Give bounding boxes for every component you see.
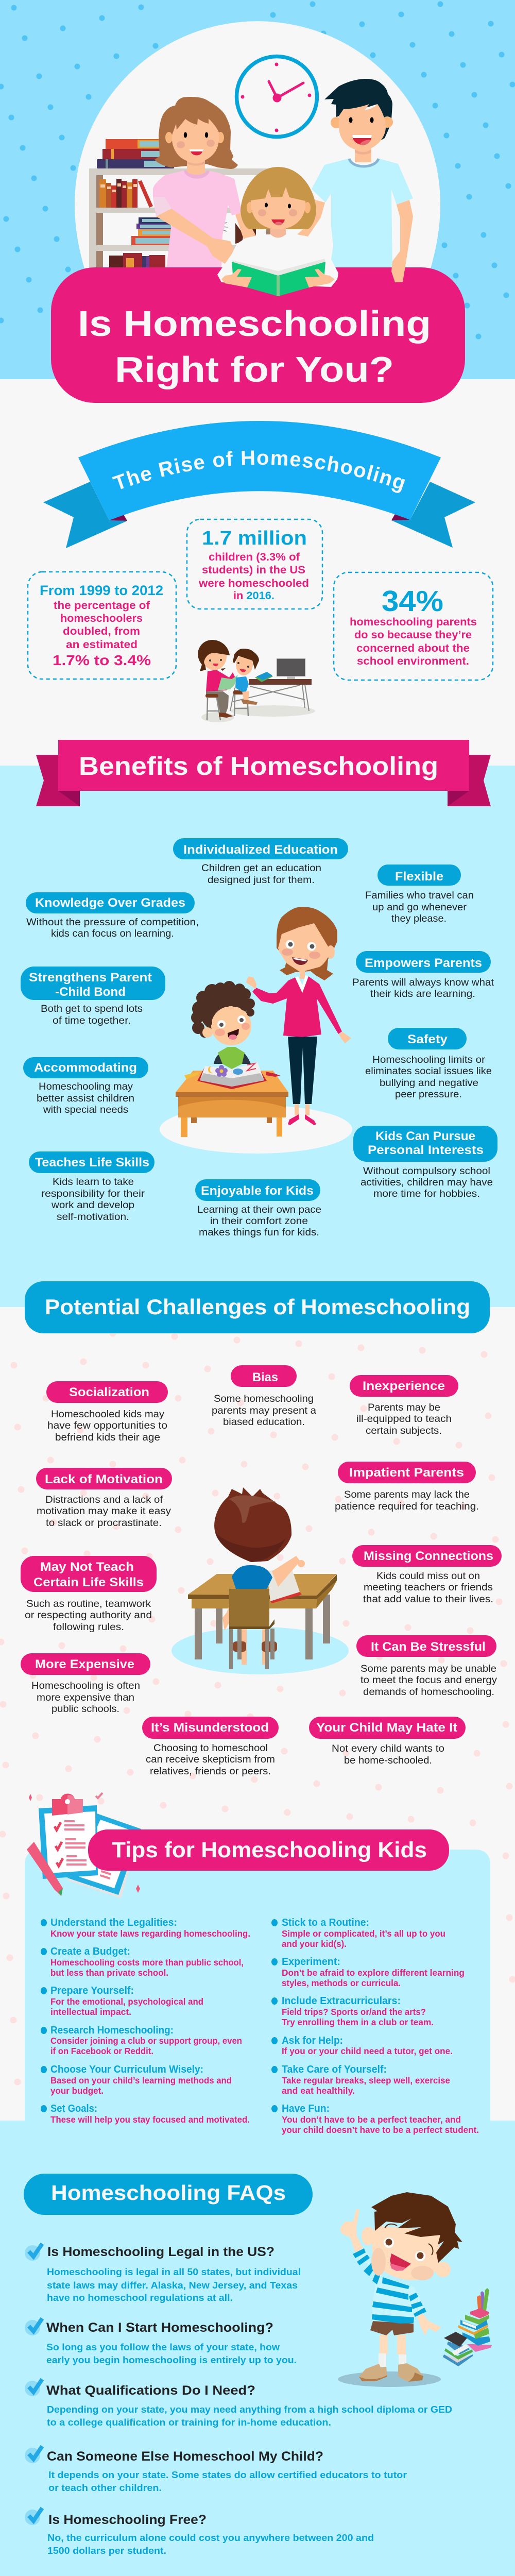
challenge: Missing Connections: Kids could miss out on (376, 1571, 480, 1582)
challenge: More Expensive: Homeschooling is often (31, 1681, 140, 1691)
challenge: Impatient Parents: Some parents may lack the (344, 1489, 470, 1500)
icon: check mark (25, 2508, 42, 2525)
stat box: 1999 to 2012: From 1999 to 2012 (40, 583, 163, 598)
FAQ: Is Homeschooling Free: 1500 dollars per student. (47, 2546, 166, 2556)
benefit: Strengthens Parent-Child Bond: of time together. (53, 1015, 131, 1026)
FAQ: What Qualifications: What Qualifications Do I Need? (46, 2383, 255, 2398)
tip: Prepare Yourself: Prepare Yourself: (50, 1985, 134, 1996)
section banner: The Rise of Homeschooling (43, 421, 475, 548)
FAQ: Can Someone Else: It depends on your state. Some states do allow certified educators to tutor (48, 2470, 407, 2480)
benefit: Teaches Life Skills: work and develop (51, 1200, 134, 1211)
tip: Ask for Help (271, 2035, 453, 2056)
benefit: Enjoyable for Kids: in their comfort zone (210, 1216, 308, 1227)
benefit: Flexible: they please. (391, 913, 447, 924)
ribbon tails (36, 755, 491, 806)
icon: check mark (25, 2244, 42, 2261)
challenge: Impatient Parents: Impatient Parents (349, 1466, 464, 1480)
benefit: Kids Can Pursue Personal Interests: more time for hobbies. (373, 1189, 480, 1199)
tip: Ask for Help: If you or your child need a tutor, get one. (282, 2046, 453, 2056)
heading pill: Homeschooling FAQs (51, 2181, 286, 2205)
tip: Have Fun: Have Fun: (282, 2103, 330, 2114)
tips column: right (271, 1917, 479, 2135)
hero: family illustration and title (51, 21, 465, 403)
challenge: Your Child May Hate It: Not every child wants to (332, 1743, 444, 1754)
challenge: Inexperience (350, 1375, 458, 1436)
title: Is Homeschooling (78, 303, 431, 344)
tip: Include Extracurriculars (271, 1995, 434, 2027)
FAQ: Is Homeschooling Free: No, the curriculum alone could cost you anywhere between 200 and (47, 2533, 374, 2543)
challenge: Lack of Motivation: Distractions and a lack of (45, 1495, 163, 1505)
challenge: Inexperience: Parents may be (368, 1402, 440, 1413)
stools (207, 694, 248, 720)
benefit: Kids Can Pursue Personal Interests: Without compulsory school (363, 1166, 490, 1177)
tip: Take Care of Yourself: Take regular breaks, sleep well, exercise (282, 2075, 450, 2086)
challenge: Impatient Parents (335, 1462, 479, 1512)
benefit: Knowledge Over Grades: Without the pressure of competition, (26, 917, 199, 928)
challenge: It's Misunderstood (142, 1717, 279, 1777)
FAQ: When Can I Start: early you begin homeschooling is entirely up to you. (46, 2355, 297, 2365)
tip: Include Extracurriculars: Field trips? Sports or/and the arts? (282, 2007, 426, 2017)
challenge: It's Misunderstood: Choosing to homeschool (153, 1743, 268, 1754)
hair (214, 1487, 291, 1562)
mother (198, 640, 238, 718)
benefit: Enjoyable for Kids: makes things fun for kids. (199, 1227, 319, 1238)
shirt (353, 2248, 426, 2324)
challenge: Bias (212, 1365, 316, 1428)
tip: Have Fun (271, 2103, 479, 2135)
benefit: Individualized Education: Individualized Education (183, 843, 338, 857)
tip: Set Goals (41, 2103, 250, 2125)
challenge: It Can Be Stressful: Some parents may be unable (360, 1664, 496, 1674)
tip: Stick to a Routine: and your kid(s). (282, 1939, 347, 1949)
benefit: Safety: Safety (407, 1032, 448, 1046)
challenge: More Expensive: More Expensive (35, 1657, 134, 1671)
benefit: Teaches Life Skills: self-motivation. (57, 1212, 129, 1223)
challenge: More Expensive: public schools. (52, 1704, 119, 1715)
teacher (246, 907, 351, 1125)
icon: check mark (25, 2446, 42, 2463)
benefit: Teaches Life Skills: Teaches Life Skills (35, 1156, 149, 1170)
tip: Choose Your Curriculum Wisely: your budget. (50, 2086, 104, 2096)
book stack (443, 2288, 492, 2366)
tip: Stick to a Routine: Stick to a Routine: (282, 1917, 369, 1928)
challenge: Socialization: Homeschooled kids may (51, 1409, 165, 1420)
challenge: Lack of Motivation (36, 1468, 172, 1529)
challenge: Lack of Motivation: Lack of Motivation (45, 1472, 163, 1486)
benefit: Knowledge Over Grades: Knowledge Over Grades (35, 896, 185, 910)
stat box: 34%: concerned about the (356, 642, 470, 654)
son (233, 649, 259, 705)
benefit: Knowledge Over Grades (26, 892, 199, 939)
benefit: Accommodating: with special needs (43, 1105, 128, 1115)
tip: Prepare Yourself (41, 1985, 203, 2017)
tip: Experiment (271, 1956, 465, 1988)
open book (197, 1062, 267, 1089)
challenge: Bias: biased education. (223, 1417, 305, 1428)
benefit: Strengthens Parent-Child Bond: -Child Bond (55, 985, 126, 999)
FAQ: What Qualifications (25, 2379, 452, 2428)
benefit: Individualized Education: designed just for them. (208, 875, 315, 886)
FAQ: When Can I Start: When Can I Start Homeschooling? (46, 2320, 273, 2335)
chair (229, 1589, 274, 1669)
stat box: 1.7 million: 1.7 million (202, 528, 307, 549)
stat box: 1.7 million (187, 519, 322, 609)
benefit: Safety (365, 1028, 492, 1100)
heading pill (88, 1829, 449, 1871)
tip: Choose Your Curriculum Wisely: Based on your child’s learning methods and (50, 2075, 232, 2086)
tip: Set Goals: These will help you stay focused and motivated. (50, 2114, 250, 2125)
stat box: 1999 to 2012: an estimated (66, 639, 138, 651)
stat box: 1999 to 2012: the percentage of (54, 600, 150, 612)
challenge: May Not Teach Certain Life Skills: May Not Teach (40, 1560, 134, 1574)
tip: Prepare Yourself: intellectual impact. (50, 2007, 131, 2017)
tip: Research Homeschooling (41, 2025, 242, 2056)
benefit: Empowers Parents: Empowers Parents (365, 956, 482, 970)
challenge: It's Misunderstood: can receive skepticism from (146, 1754, 275, 1765)
panel: benefits (21, 838, 497, 1238)
tip: Stick to a Routine: Simple or complicated, it’s all up to you (282, 1928, 445, 1939)
boy (340, 2192, 462, 2382)
tip: Take Care of Yourself: Take Care of Yourself: (282, 2064, 387, 2075)
challenge: Socialization (46, 1381, 168, 1443)
figure: girl reading a book (217, 167, 338, 296)
legs and shoes (359, 2319, 423, 2382)
benefit: Accommodating: Accommodating (34, 1061, 137, 1075)
benefit: Empowers Parents: Parents will always know what (352, 977, 494, 988)
tip: Take Care of Yourself (271, 2064, 450, 2096)
FAQ: Is Homeschooling Free: Is Homeschooling Free? (48, 2513, 207, 2527)
benefit: Safety: Homeschooling limits or (372, 1055, 486, 1065)
benefit: Flexible: up and go whenever (372, 902, 467, 913)
benefit: Accommodating: Homeschooling may (39, 1081, 133, 1092)
challenge: Bias: parents may present a (212, 1405, 316, 1416)
challenge: Missing Connections: that add value to their lives. (363, 1594, 493, 1605)
FAQ: Is Homeschooling Legal: Is Homeschooling Legal in the US? (47, 2245, 274, 2259)
benefit: Individualized Education: Children get an education (201, 863, 321, 874)
tip: Understand the Legalities: Know your state laws regarding homeschooling. (50, 1928, 250, 1939)
FAQ: Is Homeschooling Free (25, 2508, 374, 2556)
FAQ: What Qualifications: Depending on your state, you may need anything from a high school diploma or GED (47, 2404, 452, 2415)
benefit: Teaches Life Skills: responsibility for their (41, 1189, 145, 1199)
curved ribbon title: The Rise of Homeschooling (112, 450, 405, 493)
tip: Take Care of Yourself: and eat healthily. (282, 2086, 355, 2096)
benefit: Flexible: Families who travel can (365, 890, 474, 901)
benefit: Strengthens Parent-Child Bond: Strengthens Parent (29, 971, 152, 985)
stat box: 1.7 million: students) in the US (202, 564, 305, 576)
benefit: Teaches Life Skills (29, 1151, 154, 1223)
FAQ: Is Homeschooling Legal: state laws may differ. Alaska, New Jersey, and Texas (47, 2280, 298, 2291)
tip: Research Homeschooling: Research Homeschooling: (50, 2025, 174, 2036)
tip: Experiment: Don’t be afraid to explore different learning (282, 1968, 465, 1978)
tip: Create a Budget: but less than private school. (50, 1968, 168, 1978)
challenge: More Expensive (21, 1653, 150, 1715)
benefit: Accommodating: better assist children (37, 1093, 134, 1104)
tip: Choose Your Curriculum Wisely (41, 2064, 232, 2096)
benefit: Kids Can Pursue Personal Interests: Personal Interests (368, 1143, 484, 1157)
benefit: Kids Can Pursue Personal Interests (353, 1126, 497, 1199)
illustration: mother and son at a desk (198, 640, 315, 722)
boy (191, 981, 255, 1069)
icon: check mark (25, 2318, 42, 2335)
challenge: Inexperience: ill-equipped to teach (356, 1414, 452, 1425)
bookshelf with books (89, 139, 273, 270)
FAQ: Is Homeschooling Legal: Homeschooling is legal in all 50 states, but individual (47, 2267, 301, 2277)
benefit: Safety: eliminates social issues like (365, 1066, 492, 1077)
stat box: 1.7 million: in 2016. (233, 590, 274, 602)
tip: Choose Your Curriculum Wisely: Choose Your Curriculum Wisely: (50, 2064, 203, 2075)
challenge: It Can Be Stressful (356, 1635, 497, 1698)
challenge: It's Misunderstood: It’s Misunderstood (151, 1721, 269, 1735)
stat box: 1999 to 2012: doubled, from (63, 625, 140, 637)
challenge: May Not Teach Certain Life Skills: following rules. (53, 1622, 124, 1633)
section heading: Potential Challenges: Potential Challenges of Homeschooling (45, 1295, 470, 1319)
challenge: Socialization: befriend kids their age (55, 1432, 160, 1443)
stat box: 34%: 34% (382, 585, 443, 618)
stat box: 34%: school environment. (357, 655, 469, 667)
benefit: Empowers Parents: their kids are learning. (370, 989, 475, 999)
title (78, 303, 431, 389)
challenge: Inexperience: certain subjects. (366, 1426, 442, 1436)
challenge: Lack of Motivation: to slack or procrastinate. (46, 1518, 162, 1529)
tip: Have Fun: your child doesn’t have to be a perfect student. (282, 2125, 479, 2135)
challenge: Bias: Some homeschooling (214, 1394, 314, 1404)
tip: Create a Budget (41, 1946, 244, 1978)
icon: clipboard and pen (27, 1793, 141, 1899)
challenge: Your Child May Hate It: be home-schooled. (344, 1755, 432, 1766)
ribbon body (78, 421, 441, 520)
tip: Understand the Legalities: Understand the Legalities: (50, 1917, 177, 1928)
panel: tips (25, 1793, 490, 2135)
tip: Stick to a Routine (271, 1917, 445, 1949)
challenge: It Can Be Stressful: to meet the focus and energy (360, 1675, 497, 1686)
figure: father (297, 79, 413, 269)
stat box: 1999 to 2012 (28, 572, 176, 679)
panel: challenges (21, 1365, 502, 1777)
FAQ: Can Someone Else (25, 2446, 407, 2493)
challenge: Socialization: Socialization (69, 1385, 149, 1399)
tip: Research Homeschooling: if on Facebook or Reddit. (50, 2046, 153, 2056)
benefit: Teaches Life Skills: Kids learn to take (53, 1177, 134, 1188)
tip: Include Extracurriculars: Include Extracurriculars: (282, 1995, 401, 2007)
challenge: Inexperience: Inexperience (363, 1379, 445, 1393)
benefit: Flexible: Flexible (395, 870, 443, 884)
stat box: 1.7 million: were homeschooled (198, 578, 309, 589)
benefit: Safety: peer pressure. (395, 1089, 462, 1100)
stat box: 1.7 million: children (3.3% of (209, 551, 300, 563)
challenge: May Not Teach Certain Life Skills: Such as routine, teamwork (26, 1599, 151, 1609)
panel: FAQs (24, 2174, 452, 2556)
illustration: teacher and boy at desk (160, 907, 352, 1154)
challenge: May Not Teach Certain Life Skills: or respecting authority and (25, 1610, 152, 1621)
title: Right for You? (115, 349, 394, 389)
title pill (51, 267, 465, 403)
tip: Set Goals: Set Goals: (50, 2103, 97, 2114)
heading: Benefits of Homeschooling (79, 752, 438, 781)
benefit: Empowers Parents (352, 951, 494, 999)
monitor (277, 658, 305, 681)
father's forearm and hand (391, 200, 413, 282)
stat box: 1999 to 2012: 1.7% to 3.4% (53, 652, 151, 668)
challenge: It's Misunderstood: relatives, friends or peers. (150, 1766, 271, 1777)
challenge: Missing Connections: Missing Connections (364, 1549, 493, 1563)
challenge: It Can Be Stressful: It Can Be Stressful (371, 1640, 486, 1654)
stat box: 1999 to 2012: homeschoolers (60, 613, 143, 624)
figure: mother (153, 97, 256, 269)
head (362, 2192, 462, 2280)
benefit: Individualized Education (173, 838, 348, 886)
tip: Understand the Legalities (41, 1917, 250, 1939)
benefit: Enjoyable for Kids (195, 1179, 321, 1238)
challenge: It Can Be Stressful: demands of homeschooling. (363, 1687, 494, 1698)
FAQ: Can Someone Else: or teach other children. (48, 2483, 162, 2493)
challenge: More Expensive: more expensive than (37, 1692, 134, 1703)
benefit: Strengthens Parent-Child Bond (21, 967, 165, 1026)
stat box: 34% (334, 572, 493, 680)
FAQ: When Can I Start (25, 2318, 297, 2365)
challenge: Missing Connections (352, 1545, 502, 1605)
icon: wall clock (237, 57, 317, 137)
benefit: Kids Can Pursue Personal Interests: Kids Can Pursue (375, 1129, 475, 1143)
benefit: Flexible (365, 865, 474, 924)
heading pill: Tips for Homeschooling Kids (112, 1838, 427, 1862)
dome background (75, 21, 440, 270)
desk (176, 1071, 288, 1137)
benefit: Kids Can Pursue Personal Interests: activities, children may have (360, 1177, 493, 1188)
tip: Include Extracurriculars: Try enrolling them in a club or team. (282, 2017, 434, 2027)
section heading: Potential Challenges (25, 1281, 490, 1333)
icon: check mark (25, 2379, 42, 2396)
tip: Research Homeschooling: Consider joining a club or support group, even (50, 2036, 242, 2046)
challenge: Impatient Parents: patience required for teaching. (335, 1501, 479, 1512)
desk (230, 672, 312, 711)
challenge: Lack of Motivation: motivation may make it easy (37, 1506, 171, 1517)
stat box: 34%: do so because they’re (354, 629, 472, 641)
arms (340, 2209, 363, 2252)
challenge: Missing Connections: meeting teachers or friends (364, 1582, 493, 1593)
benefit: Accommodating (23, 1057, 148, 1115)
challenge: Your Child May Hate It: Your Child May Hate It (316, 1721, 457, 1735)
FAQ: Is Homeschooling Legal (25, 2244, 301, 2303)
tip: Create a Budget: Create a Budget: (50, 1946, 130, 1957)
benefit: Enjoyable for Kids: Enjoyable for Kids (201, 1184, 314, 1198)
student (222, 1556, 305, 1665)
ribbon tails (43, 482, 475, 548)
benefit: Knowledge Over Grades: kids can focus on learning. (51, 928, 174, 939)
heading pill (24, 2174, 313, 2215)
tip: Experiment: Experiment: (282, 1956, 340, 1968)
benefit: Safety: bullying and negative (380, 1078, 478, 1089)
ribbon body (58, 740, 469, 791)
tip: Create a Budget: Homeschooling costs more than public school, (50, 1957, 244, 1968)
tip: Prepare Yourself: For the emotional, psychological and (50, 1996, 203, 2007)
tip: Have Fun: You don’t have to be a perfect teacher, and (282, 2114, 461, 2125)
illustration: pointing boy with book stack (338, 2192, 492, 2387)
benefit: Strengthens Parent-Child Bond: Both get to spend lots (41, 1004, 143, 1014)
challenge: Bias: Bias (252, 1370, 278, 1384)
tips column: left (41, 1917, 250, 2125)
challenge: Your Child May Hate It (309, 1717, 466, 1766)
challenge: May Not Teach Certain Life Skills (21, 1556, 157, 1633)
panel background (25, 1850, 490, 2123)
illustration: student at desk from behind (171, 1487, 349, 1674)
section banner: Benefits of Homeschooling (36, 740, 491, 806)
FAQ: When Can I Start: So long as you follow the laws of your state, how (46, 2342, 280, 2352)
FAQ: What Qualifications: to a college qualification or training for in-home education. (47, 2417, 331, 2428)
benefit: Enjoyable for Kids: Learning at their own pace (197, 1205, 321, 1215)
stat box: 34%: homeschooling parents (350, 616, 477, 628)
tip: Ask for Help: Ask for Help: (282, 2035, 343, 2046)
tip: Experiment: styles, methods or curricula. (282, 1978, 401, 1988)
FAQ: Is Homeschooling Legal: have no homeschool regulations at all. (47, 2293, 233, 2303)
FAQ: Can Someone Else: Can Someone Else Homeschool My Child? (47, 2449, 323, 2464)
challenge: May Not Teach Certain Life Skills: Certain Life Skills (33, 1575, 144, 1589)
challenge: Socialization: have few opportunities to (47, 1420, 167, 1431)
